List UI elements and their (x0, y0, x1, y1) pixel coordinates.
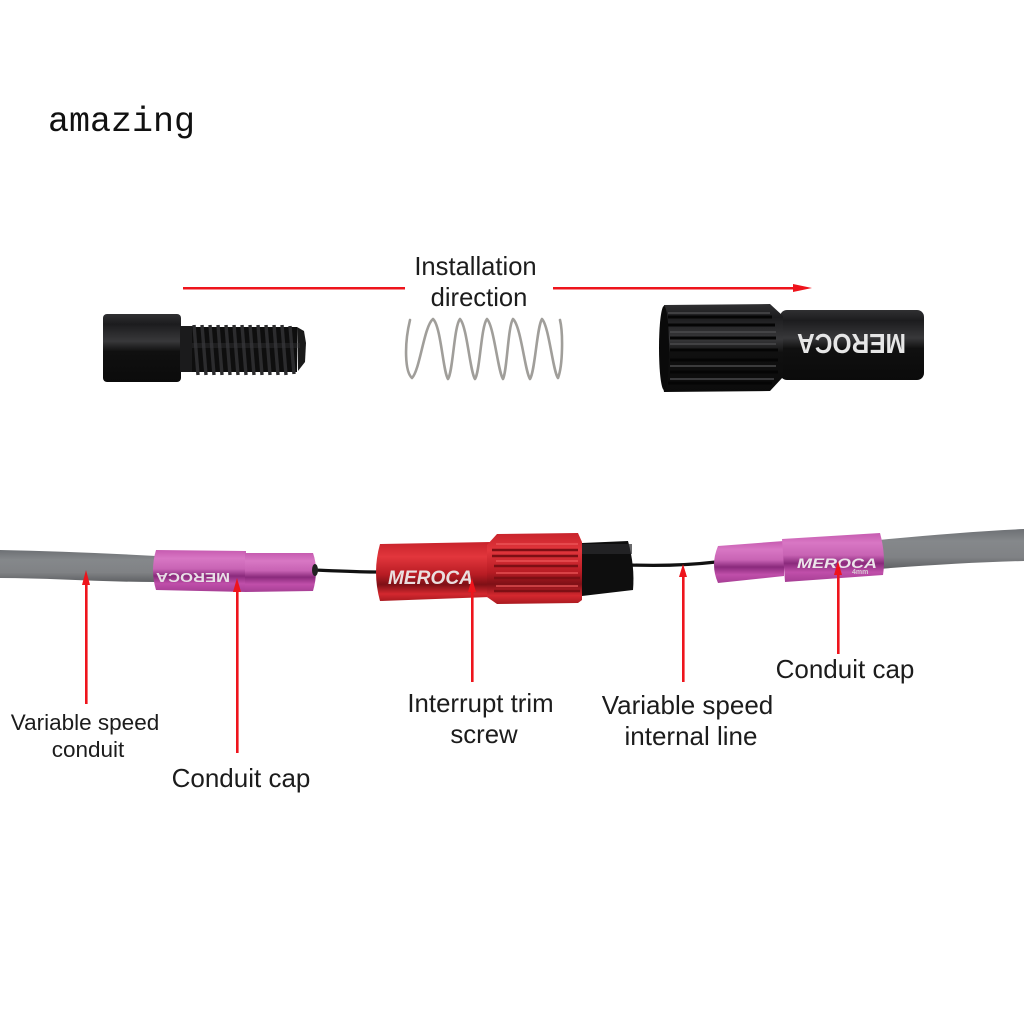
part: black adjuster barrel (659, 304, 924, 392)
label: variable speed conduit: Variable speed (11, 710, 159, 735)
arrow: interrupt trim screw (468, 578, 476, 682)
watermark: amazing: amazing (48, 102, 195, 142)
label: interrupt trim screw (407, 690, 554, 749)
arrow: left conduit cap (233, 578, 241, 753)
cable: right grey conduit (878, 529, 1024, 569)
label: variable speed internal line (602, 690, 773, 751)
label: variable speed conduit: conduit (52, 737, 125, 762)
arrow: installation direction (183, 284, 812, 292)
part: left conduit cap: MEROCA (155, 570, 230, 585)
part: right conduit cap: 4mm (852, 569, 868, 576)
label: variable speed internal line: internal line (625, 721, 757, 751)
logo: MEROCA upside-down: MEROCA (797, 328, 906, 359)
cable: inner wire (312, 562, 716, 572)
label: conduit cap right: Conduit cap (776, 654, 914, 684)
arrow: internal line (679, 564, 687, 682)
logo: MEROCA: MEROCA (388, 568, 473, 589)
heading: installation direction: Installation (414, 253, 537, 281)
label: interrupt trim screw: screw (450, 721, 518, 749)
part: right conduit cap (714, 533, 884, 583)
arrow: variable speed conduit (82, 570, 90, 704)
label: interrupt trim screw: Interrupt trim (407, 690, 554, 718)
part: spring (406, 319, 562, 379)
label: variable speed internal line: Variable speed (602, 690, 773, 720)
heading: installation direction (414, 253, 537, 312)
label: variable speed conduit (11, 710, 159, 762)
part: red trim screw (376, 533, 633, 604)
cable: left grey conduit (0, 550, 156, 582)
heading: installation direction: direction (431, 284, 527, 312)
part: left conduit cap (153, 550, 318, 592)
part: right conduit cap: MEROCA (797, 555, 877, 571)
arrow: right conduit cap (834, 561, 842, 654)
label: conduit cap left: Conduit cap (172, 763, 310, 793)
part: black screw (103, 314, 306, 382)
